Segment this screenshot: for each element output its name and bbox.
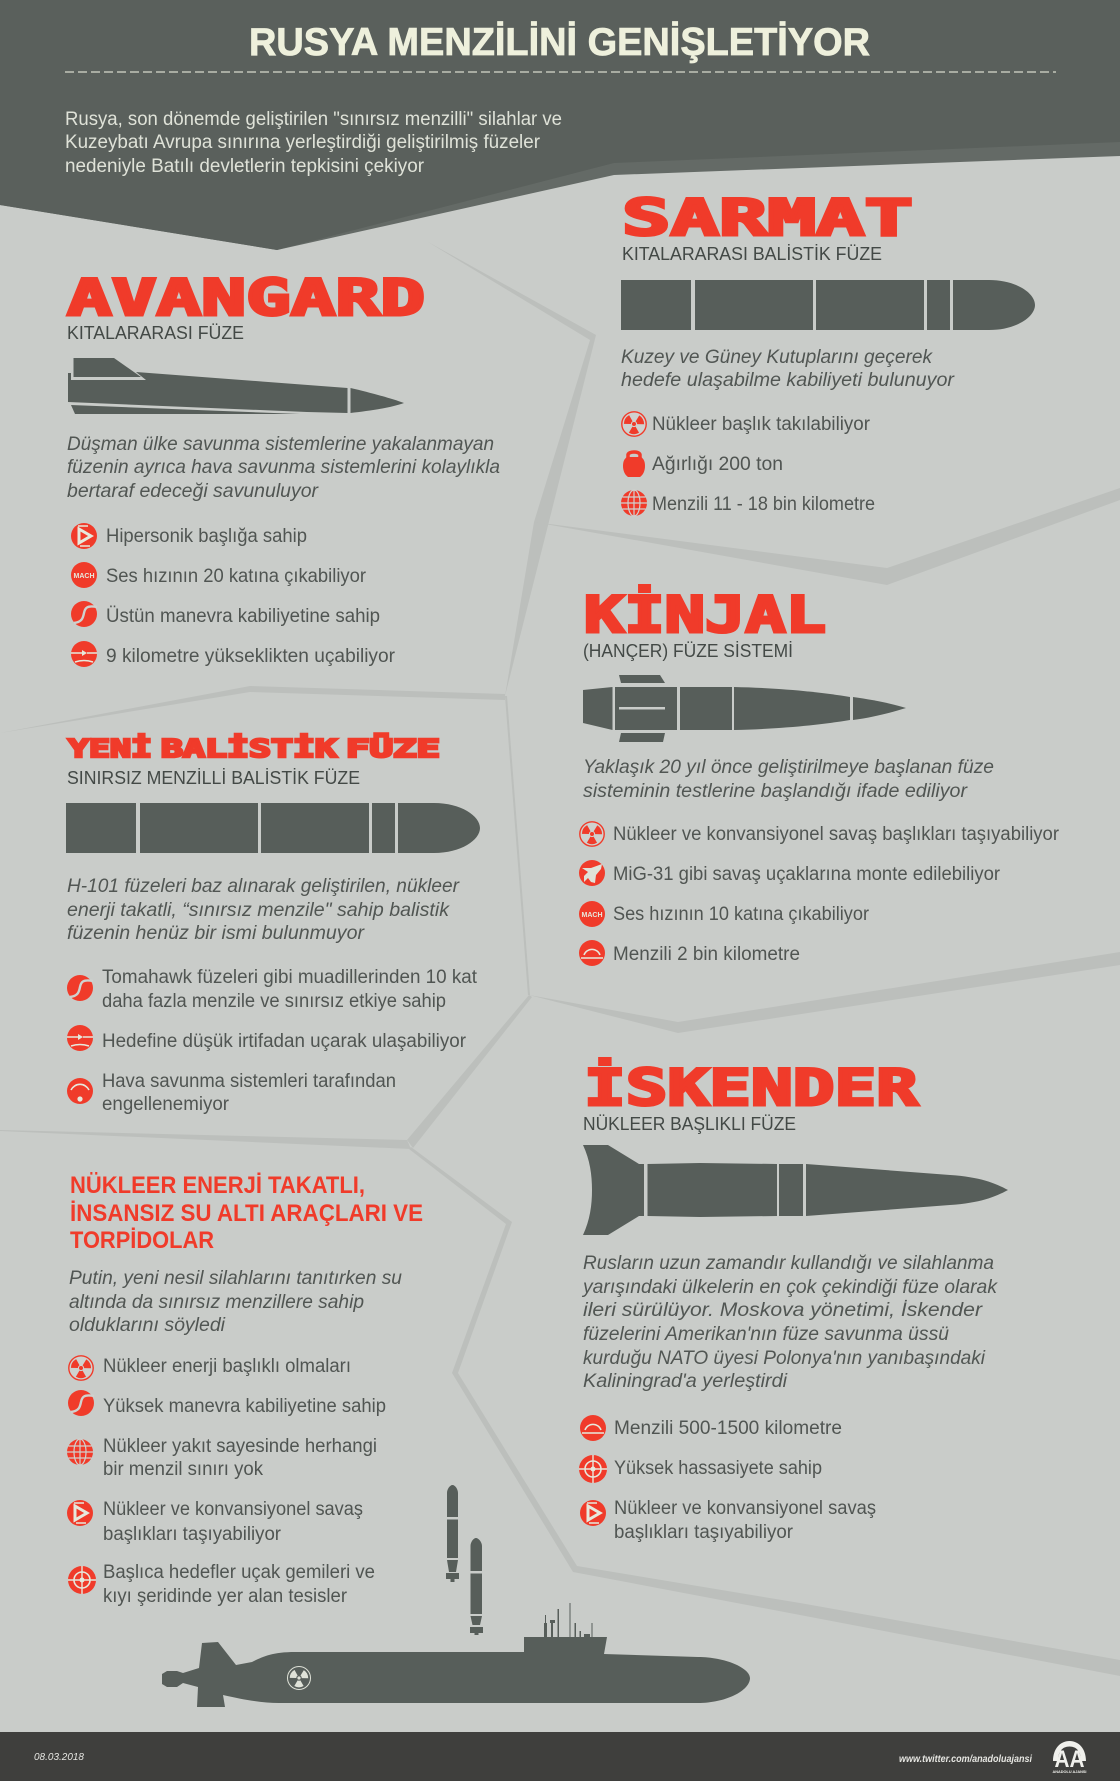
Nükleer facts: Nükleer yakıt sayesinde herhangi bbox=[103, 1436, 377, 1457]
Avangard description bbox=[67, 434, 500, 502]
Sarmat subtitle: KITALARARASI BALİSTİK FÜZE bbox=[622, 244, 882, 264]
Sarmat facts: Menzili 11 - 18 bin kilometre bbox=[652, 494, 875, 515]
Yeni balistik facts bbox=[67, 967, 478, 1115]
Sarmat description: hedefe ulaşabilme kabiliyeti bulunuyor bbox=[621, 370, 955, 391]
panel: Kinjal bbox=[579, 586, 1060, 966]
Avangard heading: AVANGARD bbox=[67, 269, 425, 327]
icon: radiation on hull bbox=[288, 1666, 310, 1690]
footer bbox=[0, 1732, 1120, 1781]
Yeni balistik description bbox=[67, 876, 460, 944]
Nükleer heading: NÜKLEER ENERJİ TAKATLI, bbox=[70, 1172, 365, 1199]
İskender description bbox=[581, 1253, 999, 1392]
Nükleer heading: TORPİDOLAR bbox=[70, 1227, 214, 1254]
Avangard facts: MACH bbox=[74, 573, 94, 580]
Avangard facts: Üstün manevra kabiliyetine sahip bbox=[106, 606, 380, 627]
Nükleer facts bbox=[67, 1356, 386, 1607]
İskender description: ileri sürülüyor. Moskova yönetimi, İskender bbox=[583, 1300, 983, 1321]
Yeni balistik subtitle: SINIRSIZ MENZİLLİ BALİSTİK FÜZE bbox=[67, 768, 360, 788]
İskender facts: Yüksek hassasiyete sahip bbox=[614, 1458, 822, 1479]
Yeni balistik facts: daha fazla menzile ve sınırsız etkiye sahip bbox=[102, 991, 446, 1012]
date: 08.03.2018 bbox=[34, 1752, 84, 1763]
Nükleer facts: Nükleer enerji başlıklı olmaları bbox=[103, 1356, 351, 1377]
Nükleer facts: Yüksek manevra kabiliyetine sahip bbox=[103, 1396, 386, 1417]
Sarmat facts: Nükleer başlık takılabiliyor bbox=[652, 414, 871, 435]
Avangard facts bbox=[71, 523, 396, 667]
Sarmat facts bbox=[621, 412, 875, 516]
Kinjal facts bbox=[579, 822, 1060, 966]
İskender missile bbox=[583, 1145, 1008, 1235]
Yeni balistik heading: BALİSTİK bbox=[161, 733, 337, 763]
Kinjal description: sisteminin testlerine başlandığı ifade ediliyor bbox=[583, 781, 968, 802]
Nükleer facts: kıyı şeridinde yer alan tesisler bbox=[103, 1586, 348, 1607]
İskender heading: İSKENDER bbox=[584, 1059, 919, 1117]
Kinjal facts: MACH bbox=[582, 912, 602, 919]
Avangard facts: 9 kilometre yükseklikten uçabiliyor bbox=[106, 646, 396, 667]
torpedo 2 bbox=[470, 1538, 483, 1635]
torpedo 1 bbox=[446, 1485, 459, 1582]
İskender facts: Nükleer ve konvansiyonel savaş bbox=[614, 1498, 876, 1519]
İskender facts bbox=[579, 1415, 876, 1543]
Kinjal heading: KİNJAL bbox=[584, 586, 826, 644]
Avangard facts: Hipersonik başlığa sahip bbox=[106, 526, 307, 547]
Avangard missile bbox=[68, 358, 404, 414]
Nükleer facts: başlıkları taşıyabiliyor bbox=[103, 1524, 282, 1545]
Avangard description: bertaraf edeceği savunuluyor bbox=[67, 481, 319, 502]
Kinjal description: Yaklaşık 20 yıl önce geliştirilmeye başlanan füze bbox=[583, 757, 994, 778]
Nükleer facts: bir menzil sınırı yok bbox=[103, 1459, 263, 1480]
Avangard facts: Ses hızının 20 katına çıkabiliyor bbox=[106, 566, 367, 587]
İskender facts: Menzili 500-1500 kilometre bbox=[614, 1418, 842, 1439]
header band bbox=[0, 0, 1120, 250]
Nükleer facts: Başlıca hedefler uçak gemileri ve bbox=[103, 1562, 375, 1583]
Kinjal missile bbox=[583, 675, 906, 742]
Nükleer description bbox=[69, 1268, 402, 1336]
Avangard subtitle: KITALARARASI FÜZE bbox=[67, 323, 244, 343]
İskender description: Rusların uzun zamandır kullandığı ve silahlanma bbox=[583, 1253, 994, 1274]
logo: Anadolu Ajansı: ANADOLU AJANSI bbox=[1052, 1769, 1086, 1774]
İskender description: kurduğu NATO üyesi Polonya'nın yanıbaşındaki bbox=[583, 1348, 986, 1369]
panel: Yeni balistik füze bbox=[66, 733, 480, 1115]
Avangard description: Düşman ülke savunma sistemlerine yakalanmayan bbox=[67, 434, 494, 455]
Kinjal facts: Menzili 2 bin kilometre bbox=[613, 944, 800, 965]
İskender facts: başlıkları taşıyabiliyor bbox=[614, 1522, 794, 1543]
Kinjal subtitle: (HANÇER) FÜZE SİSTEMİ bbox=[583, 641, 793, 661]
intro text: nedeniyle Batılı devletlerin tepkisini çekiyor bbox=[65, 156, 425, 177]
logo: Anadolu Ajansı: AA bbox=[1054, 1746, 1084, 1773]
Nükleer heading bbox=[70, 1172, 423, 1254]
Yeni balistik description: enerji takatli, “sınırsız menzile" sahip balistik bbox=[67, 900, 451, 921]
Avangard description: füzenin ayrıca hava savunma sistemlerini kolaylıkla bbox=[67, 457, 500, 478]
Sarmat heading: SARMAT bbox=[622, 189, 913, 247]
İskender description: yarışındaki ülkelerin en çok çekindiği füze olarak bbox=[581, 1277, 999, 1298]
Yeni balistik facts: Hedefine düşük irtifadan uçarak ulaşabiliyor bbox=[102, 1031, 467, 1052]
Nükleer description: olduklarını söyledi bbox=[69, 1315, 226, 1336]
Sarmat facts: Ağırlığı 200 ton bbox=[652, 454, 783, 475]
title: RUSYA MENZİLİNİ GENİŞLETİYOR bbox=[249, 21, 870, 64]
Yeni balistik heading: FÜZE bbox=[346, 733, 440, 763]
Sarmat description: Kuzey ve Güney Kutuplarını geçerek bbox=[621, 347, 933, 368]
Yeni balistik missile bbox=[66, 803, 480, 853]
Kinjal facts: Nükleer ve konvansiyonel savaş başlıkları taşıyabiliyor bbox=[613, 824, 1060, 845]
Yeni balistik facts: Hava savunma sistemleri tarafından bbox=[102, 1071, 396, 1092]
Yeni balistik description: H-101 füzeleri baz alınarak geliştirilen, nükleer bbox=[67, 876, 460, 897]
twitter url: www.twitter.com/anadoluajansi bbox=[899, 1754, 1032, 1765]
İskender description: Kaliningrad'a yerleştirdi bbox=[583, 1371, 788, 1392]
İskender description: füzelerini Amerikan'nın füze savunma üssü bbox=[583, 1324, 949, 1345]
Yeni balistik description: füzenin henüz bir ismi bulunmuyor bbox=[67, 923, 365, 944]
submarine bbox=[162, 1603, 750, 1707]
intro text bbox=[65, 109, 562, 177]
İskender subtitle: NÜKLEER BAŞLIKLI FÜZE bbox=[583, 1114, 796, 1134]
Sarmat description bbox=[621, 347, 955, 391]
Nükleer facts: Nükleer ve konvansiyonel savaş bbox=[103, 1499, 363, 1520]
Yeni balistik facts: Tomahawk füzeleri gibi muadillerinden 10 kat bbox=[102, 967, 478, 988]
Yeni balistik facts: engellenemiyor bbox=[102, 1094, 230, 1115]
Kinjal facts: MiG-31 gibi savaş uçaklarına monte edilebiliyor bbox=[613, 864, 1001, 885]
panel: Avangard bbox=[67, 269, 500, 667]
Kinjal facts: Ses hızının 10 katına çıkabiliyor bbox=[613, 904, 870, 925]
Nükleer description: Putin, yeni nesil silahlarını tanıtırken su bbox=[69, 1268, 402, 1289]
Yeni balistik heading: YENİ bbox=[68, 733, 152, 763]
Kinjal description bbox=[583, 757, 994, 802]
panel: Nükleer enerji takatli araçlar bbox=[67, 1172, 423, 1607]
panel: Sarmat bbox=[621, 189, 1035, 516]
Nükleer description: altında da sınırsız menzillere sahip bbox=[69, 1292, 364, 1313]
intro text: Kuzeybatı Avrupa sınırına yerleştirdiği geliştirilmiş füzeler bbox=[65, 132, 541, 153]
Sarmat missile bbox=[621, 280, 1035, 330]
panel: İskender bbox=[579, 1059, 1008, 1543]
Yeni balistik heading bbox=[68, 733, 440, 763]
Nükleer heading: İNSANSIZ SU ALTI ARAÇLARI VE bbox=[70, 1200, 423, 1227]
intro text: Rusya, son dönemde geliştirilen "sınırsız menzilli" silahlar ve bbox=[65, 109, 562, 130]
